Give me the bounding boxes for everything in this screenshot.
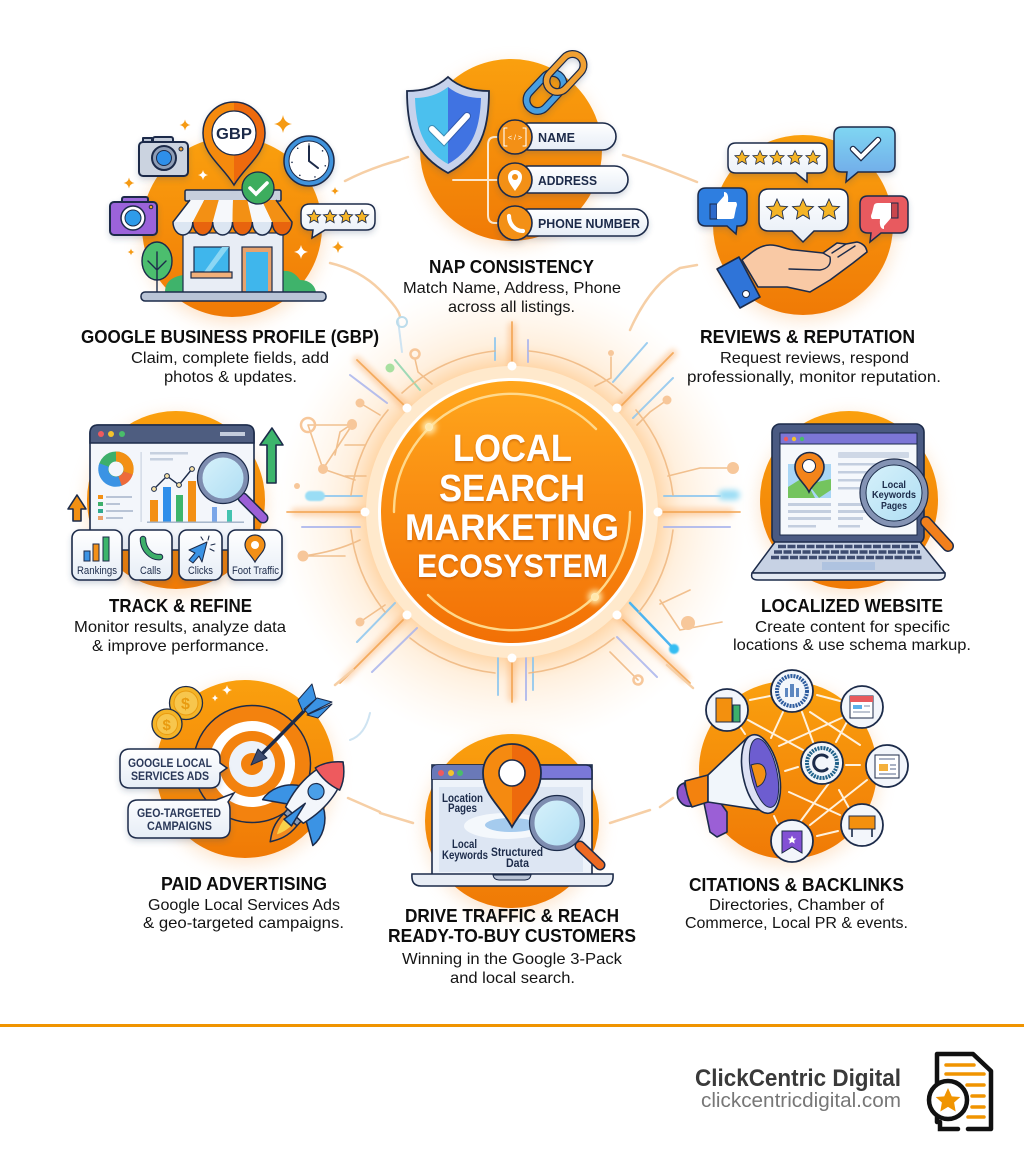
icon: shield with check	[407, 77, 489, 173]
callout: geo-targeted campaigns	[128, 793, 234, 838]
label pill: name: NAME	[538, 130, 575, 145]
text block: across all listings.	[448, 299, 575, 316]
icon: laptop	[752, 424, 945, 580]
panel: reviews and reputation	[687, 127, 941, 386]
heading: GOOGLE BUSINESS PROFILE (GBP)	[81, 327, 379, 347]
text block: & geo-targeted campaigns.	[143, 915, 344, 932]
tile: foot traffic	[228, 530, 282, 580]
central hub: Local Search Marketing Ecosystem	[360, 362, 662, 662]
connector lines	[453, 137, 498, 223]
callout: Google Local Services Ads: SERVICES ADS	[131, 769, 209, 783]
icon: coins	[152, 686, 202, 739]
chart: bars with trend line	[147, 467, 244, 523]
icon: shirt cuff	[717, 257, 760, 308]
icon: GBP map pin	[203, 102, 265, 185]
label pill: name	[498, 120, 616, 154]
icon: chamber of commerce seal	[771, 670, 813, 712]
icon: thumbs down	[860, 196, 908, 242]
icon: ground	[141, 292, 326, 301]
icon: magnifier with keywords: Keywords	[872, 489, 916, 501]
label pill: name: </>	[508, 135, 522, 142]
heading: CITATIONS & BACKLINKS	[689, 875, 904, 895]
icon: map pin	[483, 744, 541, 827]
tile: rankings: Rankings	[77, 565, 117, 577]
callout: check mark	[834, 127, 895, 182]
text block: and local search.	[450, 970, 575, 987]
icon: coins: $	[181, 696, 190, 713]
text block: Google Local Services Ads	[148, 897, 340, 914]
text block: professionally, monitor reputation.	[687, 369, 941, 386]
labels on page	[442, 793, 543, 870]
tile: clicks	[179, 530, 222, 580]
icon: map with pin	[788, 453, 831, 498]
panel: Google Business Profile	[81, 102, 379, 386]
text block	[143, 897, 344, 932]
heading: REVIEWS & REPUTATION	[700, 327, 915, 347]
footer divider	[0, 1024, 1024, 1027]
legend	[98, 495, 133, 520]
brand name: ClickCentric Digital	[695, 1065, 901, 1092]
icon: magnifier with keywords: Pages	[881, 500, 907, 512]
labels on page: Pages	[448, 803, 477, 815]
text block	[402, 951, 623, 987]
callout: geo-targeted campaigns: GEO-TARGETED	[137, 806, 221, 820]
heading: DRIVE TRAFFIC & REACH	[405, 906, 619, 926]
heading: PAID ADVERTISING	[161, 874, 327, 894]
icon: magnifier with keywords: Local	[882, 479, 906, 491]
icon: central citation badge	[801, 742, 843, 784]
text block: locations & use schema markup.	[733, 637, 971, 654]
labels on page: Structured	[491, 847, 543, 859]
callout: three stars	[759, 189, 848, 242]
text block	[131, 350, 329, 386]
icon: newspaper	[866, 745, 908, 787]
callout: Google Local Services Ads	[120, 749, 227, 788]
label pill: phone number: PHONE NUMBER	[538, 216, 641, 231]
icon: clock	[284, 136, 334, 186]
label pill: address: ADDRESS	[538, 173, 597, 188]
callout: geo-targeted campaigns: CAMPAIGNS	[147, 819, 212, 833]
icon: magnifying glass	[198, 452, 263, 518]
panel: citations and backlinks	[677, 670, 908, 932]
heading: READY-TO-BUY CUSTOMERS	[388, 926, 636, 946]
icon: arrow in bullseye	[251, 684, 332, 765]
icon: banner badge	[771, 820, 813, 862]
icon: laptop browser	[412, 765, 613, 886]
text block	[403, 280, 621, 316]
text block: Create content for specific	[755, 619, 950, 636]
central network background: glow, rays and circuit lines	[277, 155, 747, 823]
icon: chain links	[522, 49, 588, 116]
title text: MARKETING	[405, 507, 619, 548]
text block	[685, 897, 908, 932]
title text: SEARCH	[439, 468, 585, 510]
text block: Request reviews, respond	[720, 350, 909, 367]
title text: ECOSYSTEM	[417, 548, 608, 584]
chart: donut	[103, 456, 129, 482]
text block: Claim, complete fields, add	[131, 350, 329, 367]
network lines	[741, 695, 867, 836]
text block: Match Name, Address, Phone	[403, 280, 621, 297]
icon: document with star badge	[929, 1054, 991, 1129]
tile: calls: Calls	[140, 565, 161, 577]
icon: green check	[242, 172, 274, 204]
tile: clicks: Clicks	[188, 565, 213, 577]
callout: five stars	[728, 143, 827, 182]
label pill: phone number	[498, 206, 648, 240]
text block: Commerce, Local PR & events.	[685, 915, 908, 932]
icon: store	[173, 190, 292, 293]
text block: & improve performance.	[92, 638, 269, 655]
icon: megaphone	[677, 731, 787, 837]
icon: dashboard window	[90, 425, 254, 550]
text block	[74, 619, 286, 655]
icon: directory book	[706, 689, 748, 731]
heading: LOCALIZED WEBSITE	[761, 596, 943, 616]
tile: rankings	[72, 530, 122, 580]
label pill: address	[498, 163, 628, 197]
icon: green up arrow	[260, 428, 283, 483]
brand url: clickcentricdigital.com	[701, 1090, 901, 1112]
labels on page: Local	[452, 839, 477, 851]
icon: sparkles	[124, 115, 344, 259]
labels on page: Location	[442, 793, 483, 805]
callout: Google Local Services Ads: GOOGLE LOCAL	[128, 756, 212, 770]
icon: grey camera	[139, 137, 188, 176]
labels on page: Data	[506, 858, 530, 870]
icon: sparkles	[212, 685, 232, 702]
text block: photos & updates.	[164, 369, 297, 386]
pin centre	[499, 760, 525, 786]
icon: purple camera	[110, 197, 157, 235]
icon: open hand	[742, 242, 867, 292]
icon: orange up arrow	[68, 495, 86, 521]
title text	[405, 428, 619, 584]
panel: drive traffic	[388, 734, 636, 987]
text block: Winning in the Google 3-Pack	[402, 951, 623, 968]
icon: target	[194, 706, 310, 822]
text block	[733, 619, 971, 654]
icon: magnifier with keywords	[860, 459, 948, 546]
icon: thumbs up	[698, 188, 747, 234]
icon: GBP map pin: GBP	[216, 126, 252, 143]
text block: Directories, Chamber of	[709, 897, 885, 914]
panel: track and refine	[68, 411, 286, 655]
icon: magnifying glass	[530, 796, 600, 865]
wall	[183, 233, 283, 293]
labels on page: Keywords	[442, 850, 488, 862]
tile: calls	[129, 530, 172, 580]
panel: paid advertising	[120, 680, 368, 932]
footer brand	[695, 1054, 991, 1129]
icon: rocket	[245, 739, 368, 865]
callout: four star rating	[301, 204, 375, 238]
icon: tree and bushes	[142, 242, 316, 292]
text block: Monitor results, analyze data	[74, 619, 286, 636]
heading: TRACK & REFINE	[109, 596, 252, 616]
icon: coins: $	[162, 717, 172, 734]
heading: NAP CONSISTENCY	[429, 257, 594, 277]
icon: web listing	[841, 686, 883, 728]
icon: event sign	[841, 804, 883, 846]
heading	[388, 906, 636, 946]
title text: LOCAL	[453, 428, 572, 470]
tile: foot traffic: Foot Traffic	[232, 565, 279, 577]
text block	[687, 350, 941, 386]
panel: localized website	[733, 411, 971, 654]
panel: NAP consistency	[403, 49, 648, 316]
